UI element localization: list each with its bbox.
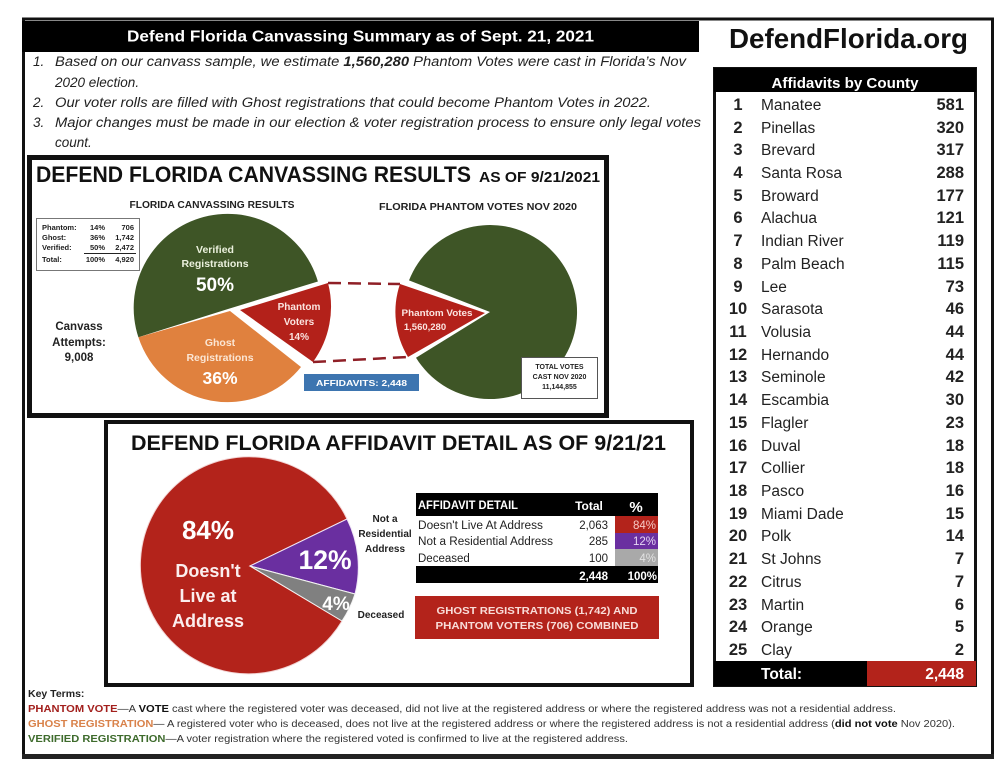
county rows: Volusia bbox=[761, 324, 811, 341]
county rows: 44 bbox=[946, 323, 965, 341]
panel: canvassing results bbox=[30, 158, 606, 416]
county rows: 5 bbox=[733, 187, 743, 205]
county rows: 317 bbox=[936, 141, 964, 159]
county rows: 23 bbox=[729, 596, 747, 614]
county rows: 2 bbox=[955, 641, 964, 659]
county rows: Citrus bbox=[761, 574, 802, 591]
dashed connectors bbox=[313, 283, 408, 362]
canvassing small table: 36% bbox=[90, 233, 105, 242]
affidavit detail table: Deceased bbox=[418, 553, 470, 565]
pie slice: does not live at address bbox=[140, 457, 347, 674]
panel: affidavit detail bbox=[106, 422, 692, 685]
county rows: 46 bbox=[946, 300, 964, 318]
canvassing small table: 4,920 bbox=[115, 255, 134, 264]
county rows: 119 bbox=[937, 232, 964, 250]
county total row: Total: bbox=[761, 666, 802, 683]
pie slice: phantom voters: Phantom bbox=[278, 302, 320, 313]
canvass attempts: Canvass bbox=[55, 321, 103, 333]
affidavit detail table: 84% bbox=[633, 520, 656, 532]
county rows: Duval bbox=[761, 438, 801, 455]
county rows: Escambia bbox=[761, 392, 829, 409]
pie slice: ghost registrations: Registrations bbox=[186, 352, 254, 364]
affidavit detail table: Doesn't Live At Address bbox=[418, 520, 543, 532]
pie slice: not a residential address bbox=[250, 519, 358, 594]
county rows: 581 bbox=[936, 96, 964, 114]
affidavit detail table: 4% bbox=[639, 553, 656, 565]
panel heading: AS OF 9/21/2021 bbox=[479, 169, 600, 186]
pie slice: ghost registrations bbox=[138, 311, 301, 402]
canvass attempts: 9,008 bbox=[65, 352, 94, 364]
pie slice: phantom voters bbox=[240, 283, 331, 362]
county rows: 7 bbox=[955, 573, 964, 591]
label: not a residential address: Not a bbox=[372, 514, 398, 525]
county table header: Affidavits by County bbox=[772, 76, 918, 92]
summary list: Based on our canvass sample, we estimate 1,560,280 Phantom Votes were cast in Florida’s Nov bbox=[55, 54, 687, 69]
affidavit detail table: 2,448 bbox=[579, 571, 609, 583]
canvassing small table: Total: bbox=[42, 255, 62, 264]
county rows: 25 bbox=[729, 641, 747, 659]
canvass attempts: Attempts: bbox=[52, 337, 106, 349]
affidavits badge bbox=[304, 374, 419, 391]
county rows: Flagler bbox=[761, 415, 808, 432]
summary list: 1. bbox=[33, 54, 44, 69]
county rows: Seminole bbox=[761, 369, 826, 386]
county rows: 5 bbox=[955, 618, 964, 636]
canvassing small table: 100% bbox=[86, 255, 105, 264]
county rows: 44 bbox=[946, 346, 965, 364]
county rows: 288 bbox=[936, 164, 964, 182]
pie slice: phantom votes bbox=[395, 284, 485, 357]
summary list bbox=[32, 54, 701, 150]
summary list: Our voter rolls are filled with Ghost registrations that could become Phantom Votes in 2022. bbox=[55, 95, 651, 110]
red callout: combined registrations: PHANTOM VOTERS (706) COMBINED bbox=[436, 620, 639, 632]
pie slice: verified registrations: 50% bbox=[196, 275, 234, 296]
canvassing small table: 1,742 bbox=[115, 233, 134, 242]
county rows: Polk bbox=[761, 528, 791, 545]
county total row: 2,448 bbox=[925, 666, 964, 683]
county rows: 18 bbox=[946, 437, 964, 455]
summary list: 2020 election. bbox=[54, 75, 139, 90]
canvassing small table: 2,472 bbox=[115, 243, 134, 252]
county rows: Alachua bbox=[761, 210, 817, 227]
pie slice: ghost registrations: 36% bbox=[202, 368, 238, 388]
county rows: 2 bbox=[733, 119, 743, 137]
county rows: Pasco bbox=[761, 483, 804, 500]
county rows: 73 bbox=[946, 278, 964, 296]
county rows: 16 bbox=[946, 482, 964, 500]
county rows: 7 bbox=[955, 550, 964, 568]
pie slice: phantom voters: 14% bbox=[289, 332, 309, 343]
total votes callout bbox=[522, 358, 598, 398]
county rows: Brevard bbox=[761, 142, 815, 159]
panel heading: DEFEND FLORIDA CANVASSING RESULTS bbox=[36, 162, 471, 187]
county rows: 3 bbox=[733, 141, 743, 159]
county rows: St Johns bbox=[761, 551, 822, 568]
header bar: Defend Florida Canvassing Summary as of Sept. 21, 2021 bbox=[127, 28, 594, 46]
county rows: 15 bbox=[729, 414, 747, 432]
label: not a residential address bbox=[358, 514, 412, 555]
county rows: 24 bbox=[729, 618, 748, 636]
county rows: 18 bbox=[729, 482, 747, 500]
panel: affidavits by county bbox=[714, 68, 976, 686]
pie slice: does not live at address: Address bbox=[172, 611, 244, 631]
county rows: Martin bbox=[761, 597, 804, 614]
total votes callout: TOTAL VOTES bbox=[535, 364, 584, 371]
affidavit detail table: 12% bbox=[633, 536, 656, 548]
canvassing small table: Ghost: bbox=[42, 233, 66, 242]
county rows bbox=[729, 96, 965, 659]
pie slice: deceased: 4% bbox=[322, 594, 350, 615]
county rows: 42 bbox=[946, 368, 964, 386]
affidavit detail table: Total bbox=[575, 499, 603, 513]
pie slice: ghost registrations: Ghost bbox=[205, 337, 236, 349]
pie heading: canvassing results: FLORIDA CANVASSING RESULTS bbox=[130, 199, 294, 211]
canvassing small table: Phantom: bbox=[42, 223, 77, 232]
county rows: 7 bbox=[733, 232, 743, 250]
affidavit detail table: 100 bbox=[589, 553, 608, 565]
affidavit detail table: 100% bbox=[628, 571, 657, 583]
county rows: 115 bbox=[937, 255, 964, 273]
red callout: combined registrations: GHOST REGISTRATIONS (1,742) AND bbox=[436, 605, 638, 617]
canvass attempts bbox=[52, 321, 106, 364]
total votes callout: 11,144,855 bbox=[542, 384, 577, 391]
county rows: 10 bbox=[729, 300, 747, 318]
affidavit detail table: Not a Residential Address bbox=[418, 536, 553, 548]
summary list: 2. bbox=[32, 95, 44, 110]
county rows: 4 bbox=[733, 164, 743, 182]
county rows: Miami Dade bbox=[761, 506, 844, 523]
county rows: Collier bbox=[761, 460, 805, 477]
county rows: 20 bbox=[729, 527, 747, 545]
county total row bbox=[714, 661, 976, 686]
key terms bbox=[28, 688, 955, 745]
pie slice: verified registrations: Registrations bbox=[181, 258, 249, 270]
county rows: Orange bbox=[761, 619, 813, 636]
county rows: 6 bbox=[733, 209, 743, 227]
pie: total votes bbox=[409, 225, 577, 399]
county rows: Hernando bbox=[761, 347, 829, 364]
affidavits badge: AFFIDAVITS: 2,448 bbox=[316, 378, 407, 388]
county rows: Manatee bbox=[761, 97, 821, 114]
pie heading: phantom votes: FLORIDA PHANTOM VOTES NOV 2020 bbox=[379, 201, 577, 213]
summary list: Major changes must be made in our election & voter registration process to ensure only legal votes bbox=[55, 115, 701, 130]
county rows: 22 bbox=[729, 573, 747, 591]
county rows: 16 bbox=[729, 437, 747, 455]
pie slice: does not live at address: Doesn't bbox=[175, 561, 241, 581]
county rows: 18 bbox=[946, 459, 964, 477]
canvassing small table: 50% bbox=[90, 243, 105, 252]
pie slice: deceased bbox=[250, 566, 355, 621]
county rows: Pinellas bbox=[761, 120, 816, 137]
pie slice: does not live at address: Live at bbox=[179, 586, 237, 606]
total votes callout: CAST NOV 2020 bbox=[533, 374, 586, 381]
pie slice: does not live at address: 84% bbox=[182, 515, 234, 545]
affidavit detail table: 285 bbox=[589, 536, 608, 548]
county rows: 17 bbox=[729, 459, 747, 477]
header bar bbox=[22, 21, 699, 52]
affidavit detail table: % bbox=[629, 499, 643, 516]
county rows: Palm Beach bbox=[761, 256, 845, 273]
red callout: combined registrations bbox=[415, 596, 659, 639]
county rows: 23 bbox=[946, 414, 964, 432]
county rows: 14 bbox=[946, 527, 965, 545]
county rows: 8 bbox=[733, 255, 743, 273]
canvassing small table bbox=[36, 218, 140, 270]
key terms: GHOST REGISTRATION — A registered voter who is deceased, does not live at the registered address or where the registered address is not a residential address ( did not vote Nov 2020). bbox=[28, 718, 955, 730]
label: deceased: Deceased bbox=[358, 610, 404, 621]
county rows: 177 bbox=[936, 187, 964, 205]
canvassing small table: Verified: bbox=[42, 243, 72, 252]
pie slice: phantom votes: Phantom Votes bbox=[402, 308, 472, 319]
key terms: Key Terms: bbox=[28, 688, 84, 700]
county rows: Broward bbox=[761, 188, 819, 205]
county rows: 1 bbox=[733, 96, 743, 114]
county rows: 12 bbox=[729, 346, 747, 364]
label: not a residential address: Address bbox=[365, 544, 405, 555]
county rows: 9 bbox=[733, 278, 743, 296]
county rows: Lee bbox=[761, 279, 787, 296]
county rows: 320 bbox=[936, 119, 964, 137]
county rows: Clay bbox=[761, 642, 792, 659]
county rows: 14 bbox=[729, 391, 748, 409]
affidavit detail table bbox=[416, 493, 658, 583]
affidavit detail table: 2,063 bbox=[579, 520, 608, 532]
pie slice: verified registrations: Verified bbox=[196, 244, 234, 256]
county rows: 11 bbox=[729, 323, 747, 341]
pie slice: phantom votes: 1,560,280 bbox=[404, 322, 446, 333]
pie slice: verified registrations bbox=[134, 214, 318, 337]
county rows: 13 bbox=[729, 368, 747, 386]
county rows: 6 bbox=[955, 596, 964, 614]
county table header bbox=[714, 68, 976, 92]
county rows: 21 bbox=[729, 550, 747, 568]
panel heading: DEFEND FLORIDA AFFIDAVIT DETAIL AS OF 9/21/21 bbox=[131, 432, 666, 455]
county rows: 121 bbox=[936, 209, 964, 227]
key terms: PHANTOM VOTE —A VOTE cast where the registered voter was deceased, did not live at the registered address or where the registered address was not a residential address. bbox=[28, 703, 896, 715]
canvassing small table: 706 bbox=[121, 223, 134, 232]
label: not a residential address: Residential bbox=[358, 529, 412, 540]
affidavit detail table: AFFIDAVIT DETAIL bbox=[418, 500, 518, 512]
county rows: Santa Rosa bbox=[761, 165, 842, 182]
county rows: Sarasota bbox=[761, 301, 823, 318]
summary list: count. bbox=[55, 135, 92, 150]
county rows: Indian River bbox=[761, 233, 844, 250]
pie slice: not a residential address: 12% bbox=[298, 545, 352, 575]
summary list: 3. bbox=[33, 115, 44, 130]
county rows: 30 bbox=[946, 391, 964, 409]
county rows: 19 bbox=[729, 505, 747, 523]
key terms: VERIFIED REGISTRATION —A voter registration where the registered voted is confirmed to live at the registered address. bbox=[28, 733, 628, 745]
canvassing small table: 14% bbox=[90, 223, 105, 232]
county rows: 15 bbox=[946, 505, 964, 523]
site name: DefendFlorida.org bbox=[729, 23, 968, 54]
pie slice: phantom voters: Voters bbox=[284, 317, 315, 328]
